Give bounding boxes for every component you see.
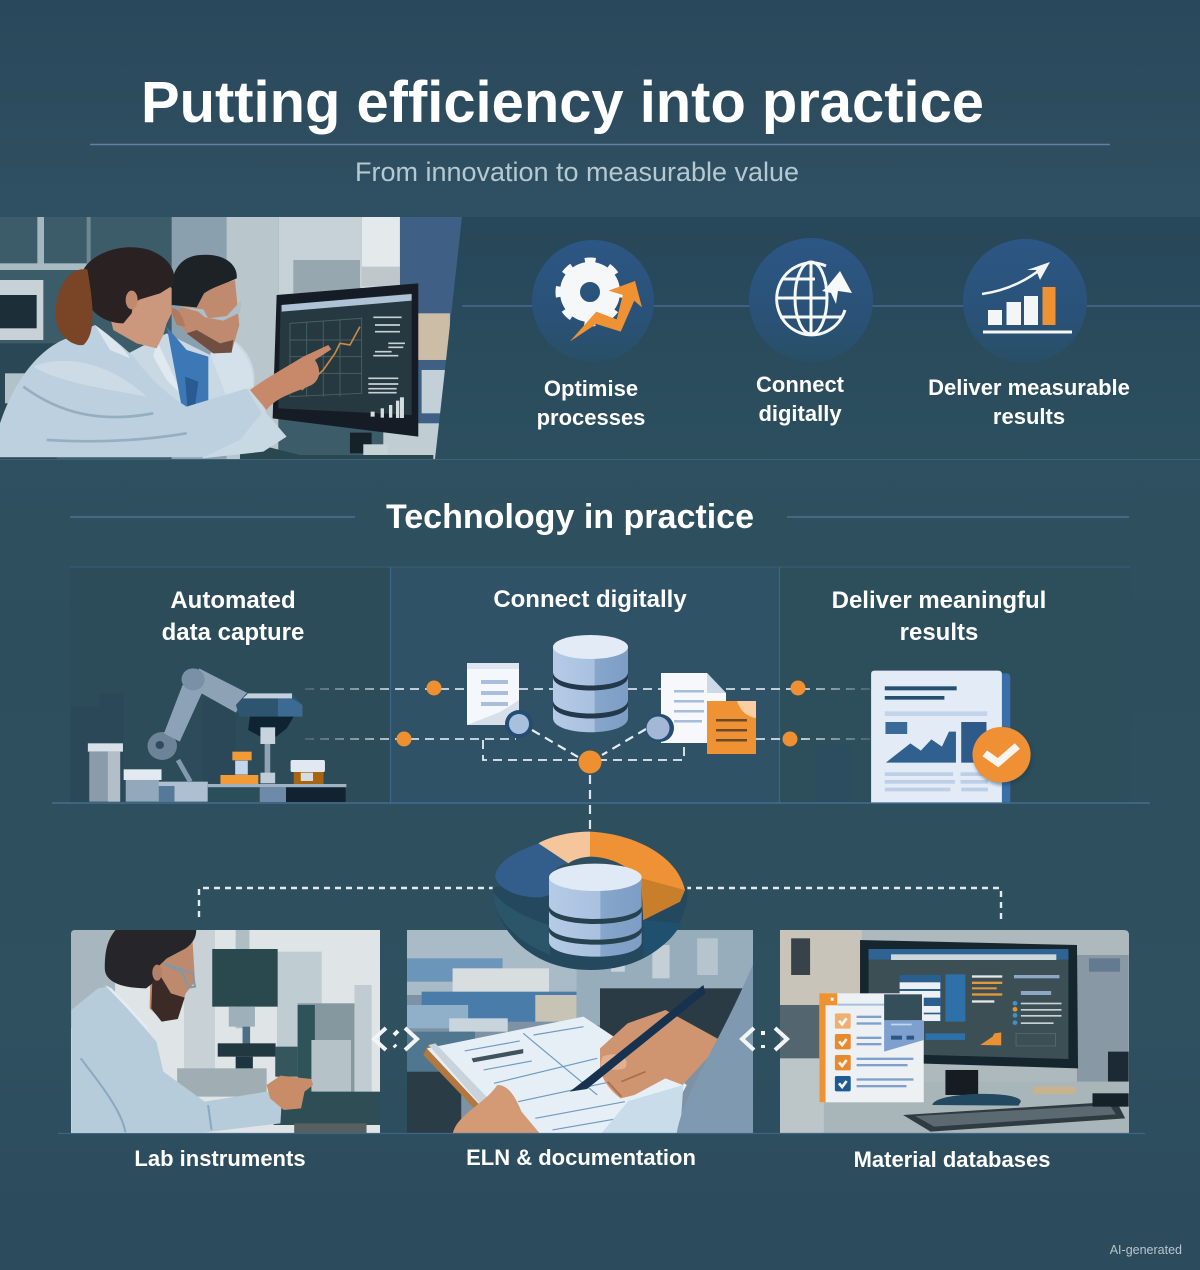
label: optimise processes: Optimise <box>544 376 638 401</box>
label: connect digitally: Connect <box>756 372 844 397</box>
label: deliver measurable results: Deliver measurable <box>928 375 1130 400</box>
icon: report with check badge <box>871 671 1033 802</box>
icon: central database hub <box>493 832 687 970</box>
photo: material databases <box>779 928 1130 1135</box>
heading: connect digitally: Connect digitally <box>493 586 687 613</box>
section heading: technology in practice: Technology in practice <box>386 498 754 536</box>
label: material databases: Material databases <box>854 1147 1050 1172</box>
icon: database <box>553 635 628 732</box>
photo: two scientists at a monitor <box>0 217 467 460</box>
man <box>128 333 287 458</box>
label: ELN and documentation: ELN & documentation <box>466 1145 696 1170</box>
data flow connectors <box>305 689 870 830</box>
label: deliver measurable results: results <box>993 404 1065 429</box>
photo: ELN and documentation <box>404 928 756 1137</box>
panel: hero band <box>0 217 1200 460</box>
icon: rising bar chart <box>963 239 1087 363</box>
bottom section connector <box>199 888 1001 920</box>
baselines under photos <box>58 1132 1145 1134</box>
icon: gear with arrow <box>532 240 654 362</box>
title block <box>90 70 1110 187</box>
icon: robotic lab arm <box>71 668 346 802</box>
icon: document with magnifier <box>467 663 533 738</box>
heading: deliver meaningful results: Deliver meaningful <box>832 587 1046 614</box>
heading: deliver meaningful results: results <box>900 619 978 646</box>
subtitle: From innovation to measurable value <box>355 157 799 187</box>
panel: technology columns <box>52 567 1150 830</box>
icon: globe with star <box>749 238 873 362</box>
woman <box>0 325 262 457</box>
hand and pen <box>600 1085 683 1135</box>
AI-generated note: AI-generated <box>1110 1243 1182 1257</box>
icon: two-way exchange arrow left <box>374 1028 417 1050</box>
connector nodes <box>396 680 806 774</box>
title: Putting efficiency into practice <box>141 70 984 135</box>
icon: documents pair <box>646 673 756 754</box>
heading: automated data capture: Automated <box>170 587 296 614</box>
label: lab instruments: Lab instruments <box>134 1146 306 1171</box>
monitor <box>860 940 1078 1068</box>
monitor <box>273 283 418 437</box>
heading: automated data capture: data capture <box>162 619 304 646</box>
checklist overlay <box>819 993 924 1102</box>
label: optimise processes: processes <box>537 405 645 430</box>
label: connect digitally: digitally <box>758 401 842 426</box>
photo: lab instruments <box>70 928 382 1135</box>
icon: two-way exchange arrow right <box>742 1028 787 1050</box>
notebook <box>424 1045 478 1108</box>
